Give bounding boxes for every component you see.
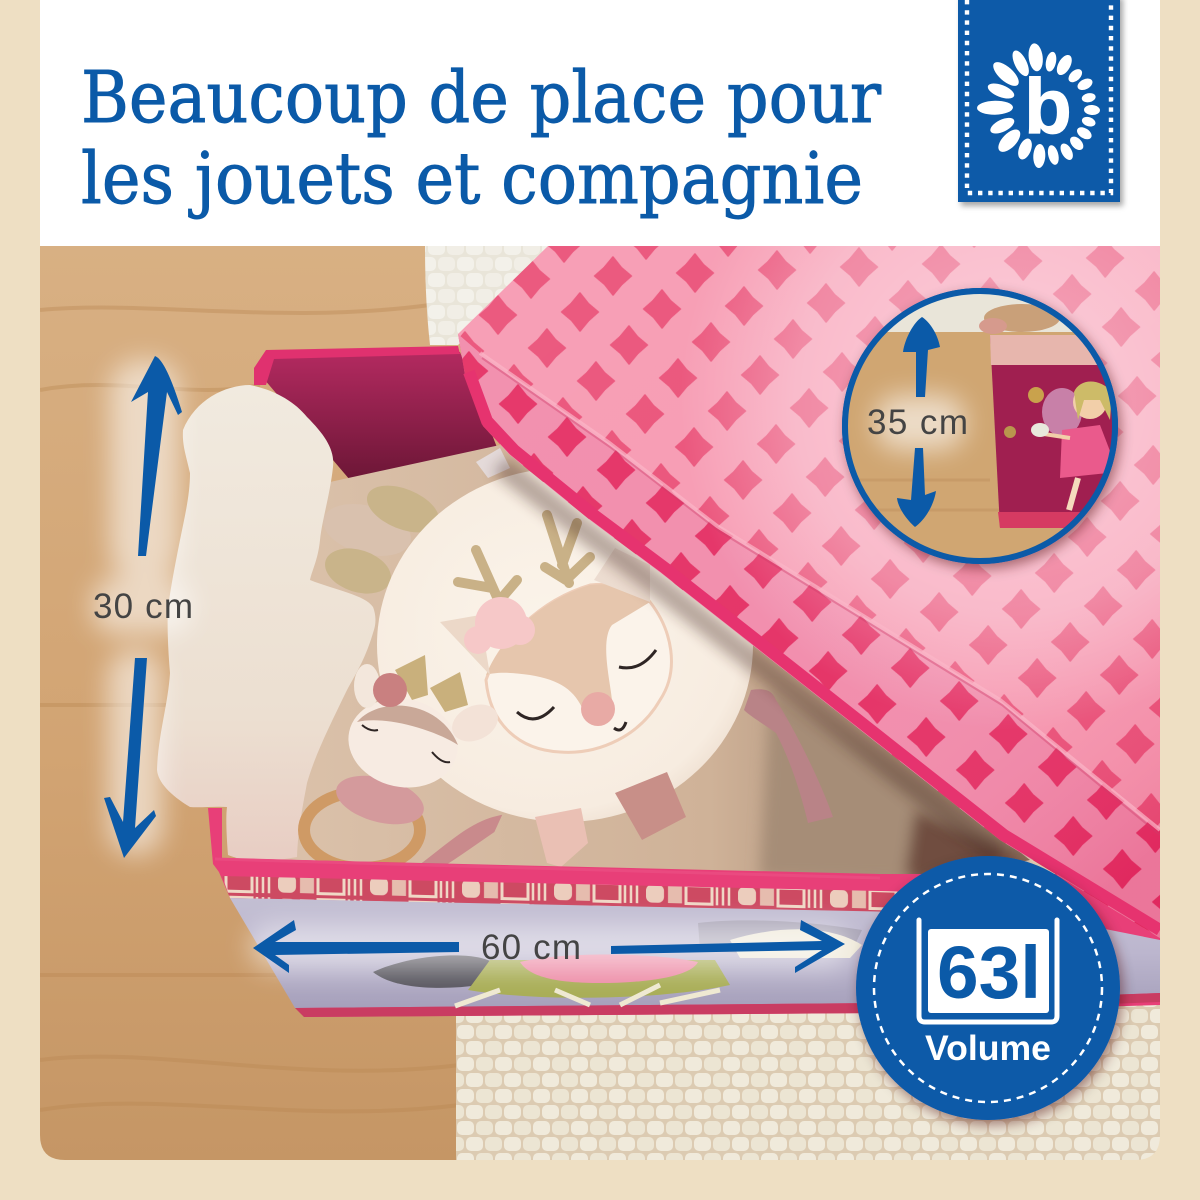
arrow: 60 cm width right [611,920,845,973]
volume value: 63l [937,931,1041,1014]
rim highlight [215,859,880,878]
box interior back wall [258,352,498,480]
arrow: 30 cm height lower [104,658,156,858]
pony artwork [373,920,862,1006]
dark garment corner [760,690,1030,882]
lid [458,246,1160,938]
rug top [425,246,548,345]
volume icon frame [919,920,1057,1022]
box rim back [254,346,460,385]
plush deer blanket [377,468,833,867]
eyes [517,650,656,730]
gold deer ears [317,448,510,601]
arrow: 35 cm height upper [903,317,940,397]
header panel [40,0,1160,246]
volume label: Volume [925,1029,1051,1068]
volume badge [856,856,1120,1120]
label: 30 cm: 30 cm [93,587,193,626]
tags [615,772,686,840]
box front panel [208,808,1160,1017]
nose [581,692,615,726]
label: 60 cm: 60 cm [481,928,581,967]
arrow: 60 cm width left [253,920,459,973]
inset toy box [990,336,1112,528]
label glows [92,360,965,969]
shadow under lid [500,465,1000,855]
logo tag: b [1024,62,1072,150]
product photo [40,246,1160,1160]
rug bottom [456,1005,1160,1160]
muslin cloth [157,385,375,861]
antlers [458,515,590,600]
wood floor [40,246,502,1160]
deer face [486,584,671,752]
title: Beaucoup de place pour [81,56,881,139]
arrow: 35 cm height lower [897,448,936,527]
label: 35 cm: 35 cm [867,403,968,442]
inset princess figure [1004,382,1118,510]
box contents: linen fill [230,445,1030,885]
title [81,56,881,220]
flower [464,597,535,654]
arrow: 30 cm height [131,356,182,556]
logo tag [958,0,1120,202]
small deer rattle [304,655,504,872]
inset circle: 35 cm height [840,285,1125,567]
title: les jouets et compagnie [81,137,863,220]
